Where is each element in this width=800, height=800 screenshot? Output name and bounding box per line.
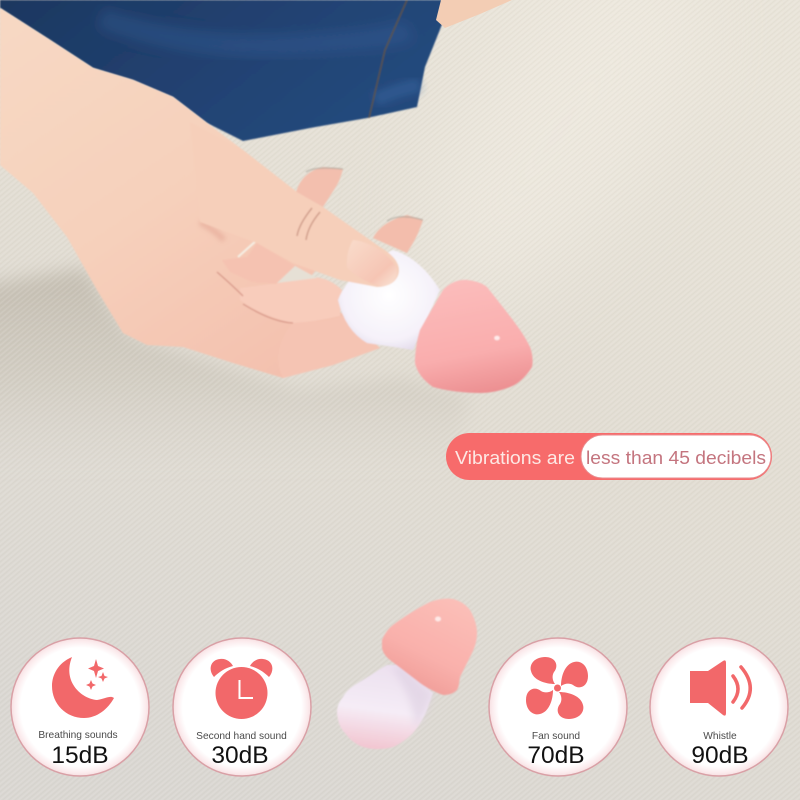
icon: fan xyxy=(526,657,588,719)
icon: speaker xyxy=(690,660,750,716)
value: 70dB xyxy=(527,742,585,769)
icon: alarm clock xyxy=(211,659,272,719)
value: 90dB xyxy=(691,742,749,769)
arm at top right xyxy=(436,0,512,28)
white gap highlight xyxy=(238,240,257,257)
finger creases xyxy=(217,272,293,323)
pink cap xyxy=(382,599,477,695)
back finger xyxy=(296,167,343,207)
palm and arm xyxy=(0,8,380,378)
label: Whistle xyxy=(703,731,737,742)
hidden finger xyxy=(222,243,295,284)
thumb and lower palm xyxy=(278,316,380,378)
icon: moon and stars xyxy=(52,657,114,718)
fabric gap between fingers xyxy=(277,266,317,283)
pink cap xyxy=(415,280,533,393)
white ball of product behind finger xyxy=(338,250,440,350)
badge: fan sound xyxy=(489,638,627,776)
white body xyxy=(337,665,433,749)
neck shadow xyxy=(392,665,433,728)
value: 30dB xyxy=(211,742,269,769)
fingernail xyxy=(347,240,397,286)
product: massager standalone xyxy=(337,599,477,749)
jeans xyxy=(0,0,447,141)
label: Second hand sound xyxy=(196,731,287,742)
index finger xyxy=(190,122,399,287)
hand xyxy=(0,8,440,378)
label: Fan sound xyxy=(532,731,580,742)
callout value: less than 45 decibels xyxy=(586,447,766,468)
badge: whistle xyxy=(650,638,788,776)
badge: second hand sound xyxy=(173,638,311,776)
badge: breathing sounds xyxy=(11,638,149,776)
value: 15dB xyxy=(51,742,109,769)
product: massager with hand xyxy=(415,280,533,393)
label: Breathing sounds xyxy=(38,730,118,741)
lower finger xyxy=(240,277,342,323)
callout label: Vibrations are xyxy=(455,447,575,468)
callout pill xyxy=(446,433,772,480)
second back finger xyxy=(373,215,423,253)
